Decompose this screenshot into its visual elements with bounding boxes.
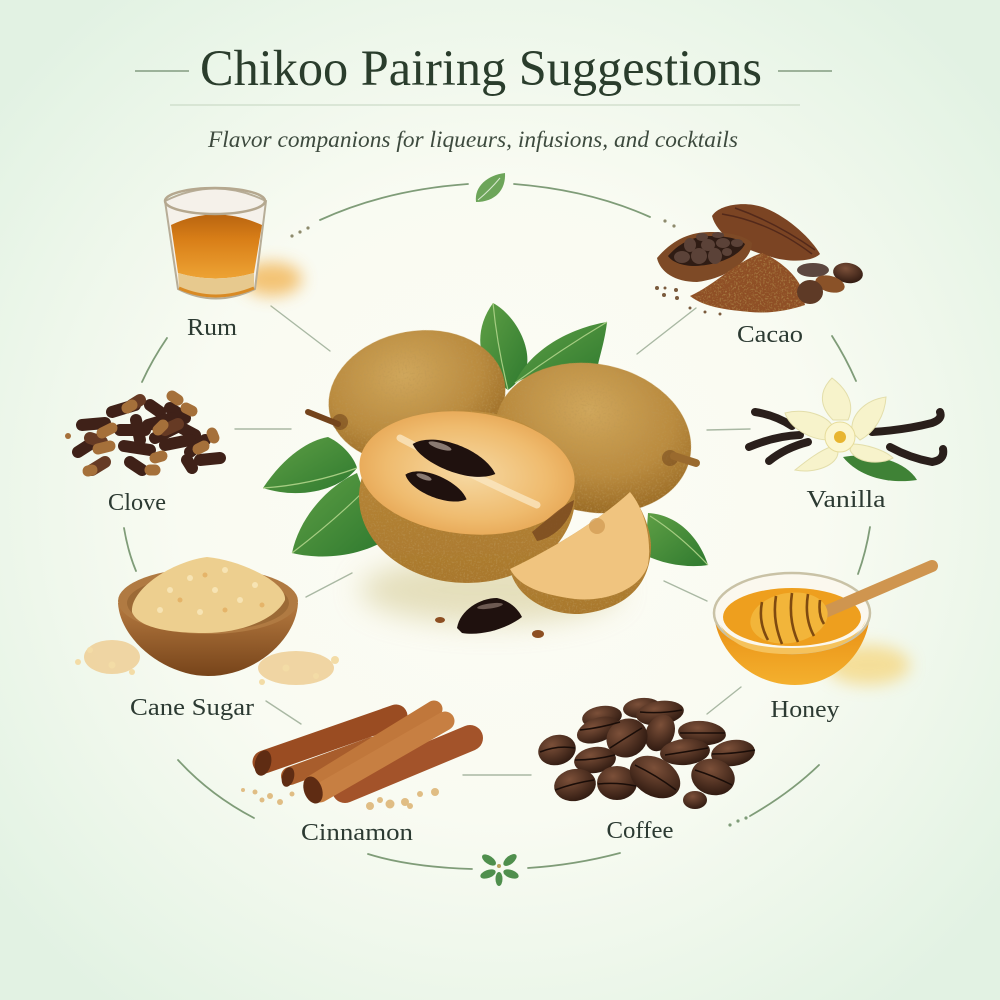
label: cinnamon: Cinnamon — [301, 820, 413, 846]
subtitle: Flavor companions for liqueurs, infusions, and cocktails — [207, 127, 738, 152]
icon: coffee beans — [535, 696, 757, 809]
chikoo fruit centrepiece — [263, 303, 708, 638]
title: Chikoo Pairing Suggestions — [200, 41, 762, 97]
label: coffee: Coffee — [606, 818, 674, 844]
label: clove: Clove — [108, 490, 166, 516]
label: honey: Honey — [770, 697, 840, 723]
seed — [435, 598, 544, 638]
left whole fruit — [308, 317, 516, 477]
icon: bowl of sugar — [75, 557, 339, 685]
decorative ring — [124, 184, 870, 869]
icon: vanilla flower and pods — [749, 378, 943, 481]
cut half — [353, 401, 581, 583]
ingredient: vanilla — [749, 378, 943, 513]
ingredient: cane sugar — [75, 557, 339, 721]
label: rum: Rum — [187, 315, 237, 341]
wedge — [510, 492, 651, 614]
icon: top leaf — [290, 173, 748, 827]
ingredient: honey — [714, 566, 932, 723]
label: vanilla: Vanilla — [806, 487, 886, 513]
ingredient: rum — [165, 188, 302, 341]
right whole fruit — [481, 345, 705, 531]
icon: bottom sprig — [479, 852, 520, 886]
label: cacao: Cacao — [737, 322, 803, 348]
label: cane sugar: Cane Sugar — [130, 695, 254, 721]
icon: rum glass — [165, 188, 302, 298]
icon: cacao pods and powder — [655, 204, 865, 316]
ingredient: cinnamon — [241, 709, 470, 846]
ingredient: clove — [65, 396, 220, 516]
icon: cinnamon sticks — [241, 709, 470, 810]
icon: honey bowl and dipper — [714, 566, 932, 685]
leaves behind fruit — [263, 303, 708, 566]
ingredient: coffee — [535, 696, 757, 844]
ingredient: cacao — [655, 204, 865, 348]
icon: clove pile — [65, 396, 220, 471]
